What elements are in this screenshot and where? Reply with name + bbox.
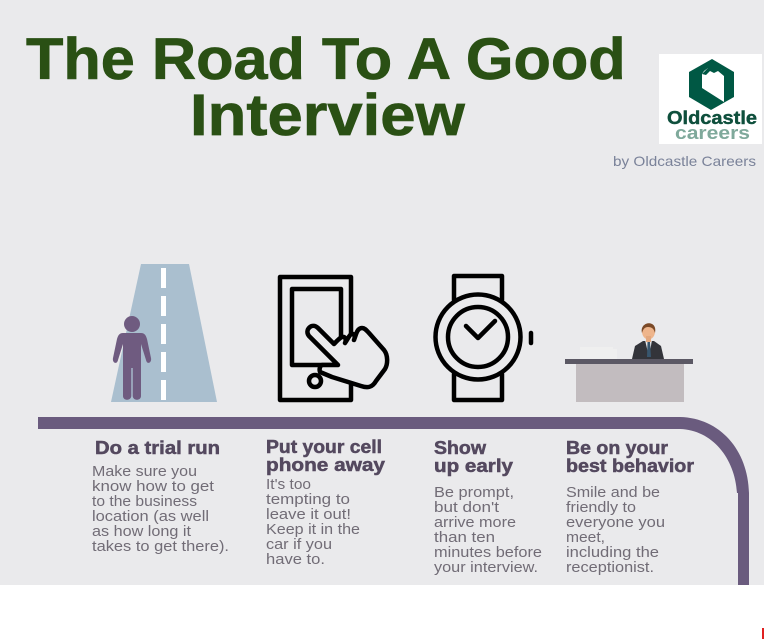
step 4: be on your best behavior: receptionist. <box>566 559 654 576</box>
logo: Oldcastle Careers: careers <box>675 123 750 143</box>
logo: Oldcastle Careers <box>659 54 762 144</box>
step 1: do a trial run: as how long it <box>92 523 192 540</box>
step 2: put your cell phone away: leave it out! <box>266 506 351 523</box>
step 3: show up early: arrive more <box>434 514 516 531</box>
icon: hand on phone <box>280 277 387 400</box>
step 1: do a trial run <box>92 438 229 555</box>
step 1: do a trial run: know how to get <box>92 478 215 495</box>
step 4: be on your best behavior: Smile and be <box>566 484 660 501</box>
title: The Road To A Good <box>26 26 626 92</box>
step 1: do a trial run: Do a trial run <box>95 438 220 458</box>
step 2: put your cell phone away: It's too <box>266 476 311 493</box>
step 3: show up early: minutes before <box>434 544 542 561</box>
step 1: do a trial run: location (as well <box>92 508 209 525</box>
title: Interview <box>190 82 466 147</box>
step 2: put your cell phone away: Keep it in the <box>266 521 360 538</box>
step 4: be on your best behavior: best behavior <box>566 456 694 476</box>
step 2: put your cell phone away: Put your cell <box>266 437 382 457</box>
step 1: do a trial run: takes to get there). <box>92 538 229 555</box>
step 3: show up early: but don't <box>434 499 500 516</box>
step 2: put your cell phone away: tempting to <box>266 491 350 508</box>
icon: receptionist at desk <box>565 323 693 402</box>
step 2: put your cell phone away <box>266 437 385 568</box>
title <box>26 26 626 147</box>
logo: Oldcastle Careers: Oldcastle <box>667 108 757 128</box>
step 4: be on your best behavior <box>566 438 694 576</box>
step 4: be on your best behavior: including the <box>566 544 659 561</box>
step 3: show up early: up early <box>434 456 513 476</box>
step 1: do a trial run: Make sure you <box>92 463 197 480</box>
step 2: put your cell phone away: phone away <box>266 455 385 475</box>
step 4: be on your best behavior: Be on your <box>566 438 668 458</box>
step 3: show up early <box>434 438 542 576</box>
road line <box>38 417 749 585</box>
step 3: show up early: your interview. <box>434 559 538 576</box>
step 3: show up early: than ten <box>434 529 495 546</box>
icon: road with person <box>111 264 217 402</box>
icon: wristwatch <box>436 276 531 400</box>
step 2: put your cell phone away: car if you <box>266 536 332 553</box>
step 3: show up early: Be prompt, <box>434 484 514 501</box>
step 3: show up early: Show <box>434 438 487 458</box>
step 4: be on your best behavior: everyone you <box>566 514 665 531</box>
step 4: be on your best behavior: meet, <box>566 529 605 546</box>
step 4: be on your best behavior: friendly to <box>566 499 636 516</box>
byline: by Oldcastle Careers <box>613 153 756 169</box>
step 1: do a trial run: to the business <box>92 493 197 510</box>
step 2: put your cell phone away: have to. <box>266 551 325 568</box>
